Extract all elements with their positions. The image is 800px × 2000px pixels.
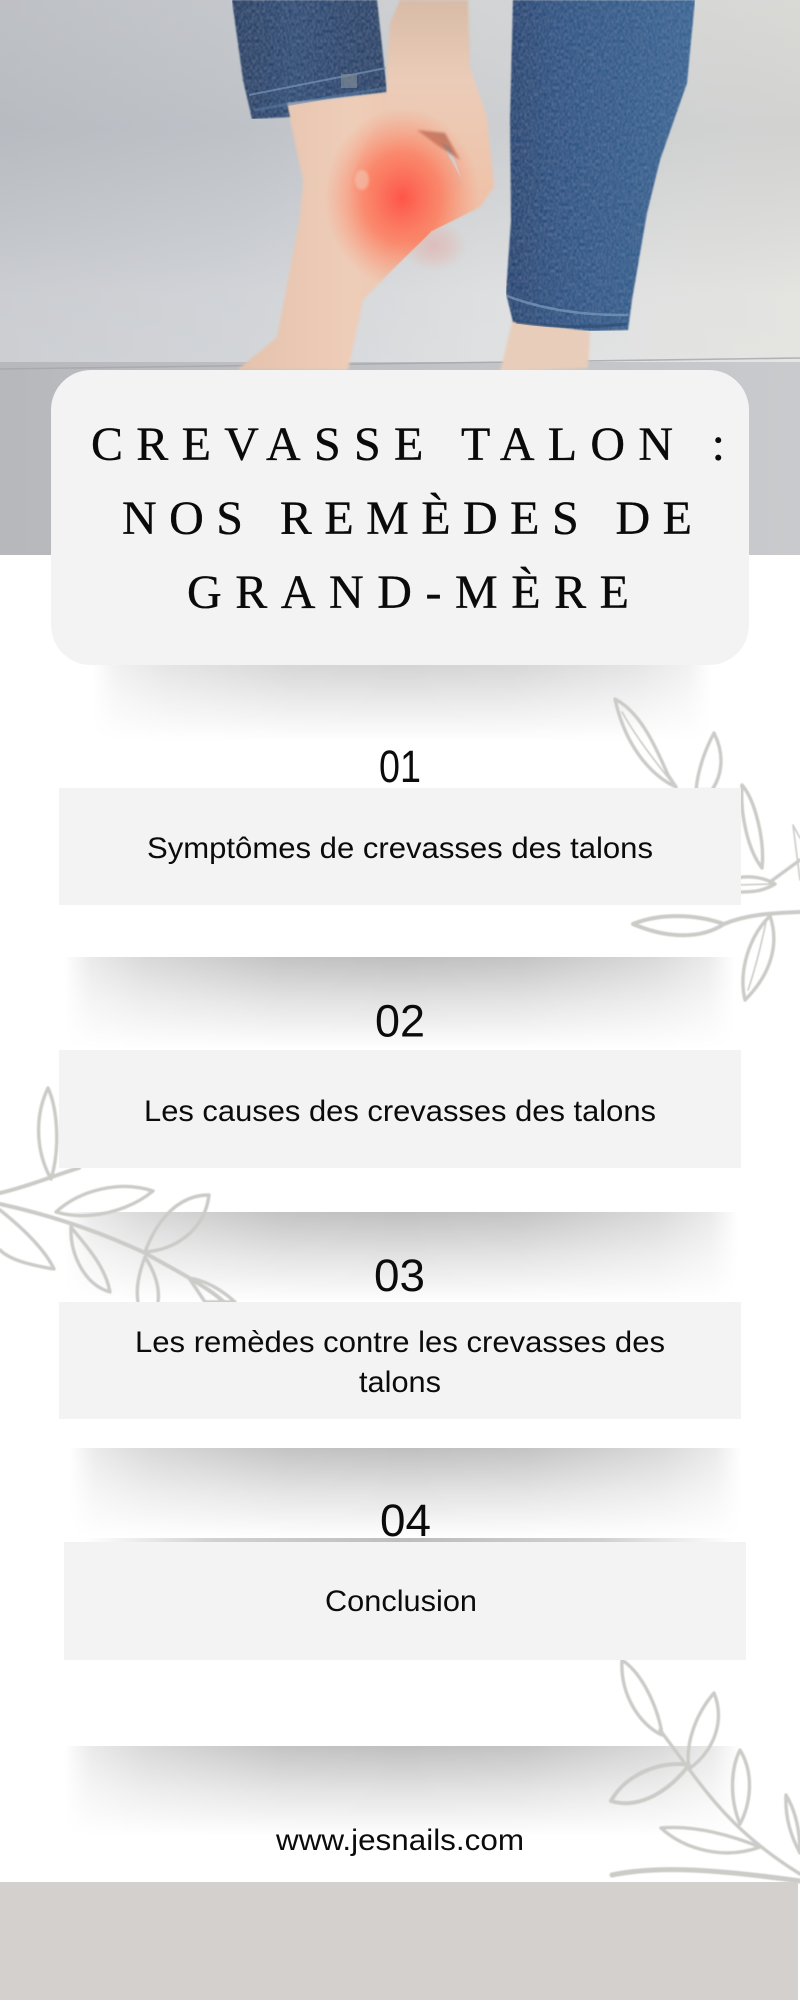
header photo: hand holding a painful heel — [0, 0, 800, 555]
heel foot — [237, 92, 465, 370]
shadow above item 03 — [74, 1212, 727, 1288]
label 03: talons — [359, 1366, 441, 1399]
box 04 — [64, 1542, 746, 1660]
shadow under title card — [106, 665, 698, 725]
divider strip above box 04 — [84, 1538, 734, 1542]
item 04 — [64, 1495, 746, 1660]
wall background — [0, 0, 800, 368]
label 02: Les causes des crevasses des talons — [144, 1095, 656, 1128]
leaves: top right branch — [615, 699, 800, 1000]
item 01 — [59, 741, 741, 905]
footer band — [0, 1882, 798, 2000]
number 01: 01 — [379, 741, 421, 792]
title card — [51, 370, 749, 665]
number 02: 02 — [375, 996, 425, 1046]
label 03 — [135, 1326, 665, 1399]
box 03 — [59, 1302, 741, 1419]
label 03: Les remèdes contre les crevasses des — [135, 1326, 665, 1359]
hand — [385, 0, 495, 232]
title text: GRAND-MÈRE — [187, 566, 629, 619]
left jean leg — [232, 0, 387, 119]
floor — [0, 358, 800, 555]
leaves: bottom right branch — [611, 1660, 800, 1881]
title text — [91, 418, 725, 619]
thumb nail — [355, 170, 369, 190]
red pain glow — [330, 114, 474, 280]
number 04: 04 — [380, 1495, 431, 1546]
item 02 — [59, 996, 741, 1168]
box 02 — [59, 1050, 741, 1168]
right jean leg — [506, 0, 695, 331]
item 03 — [59, 1250, 741, 1419]
label 04: Conclusion — [325, 1585, 477, 1618]
standing leg — [500, 318, 590, 372]
dark gap between the fingers and the heel — [417, 130, 460, 160]
shadow above item 02 — [74, 957, 724, 1035]
number 03: 03 — [374, 1250, 425, 1301]
title text: CREVASSE TALON : — [91, 418, 725, 471]
label 01: Symptômes de crevasses des talons — [147, 832, 653, 865]
leaves: left branch — [0, 1088, 235, 1302]
website: www.jesnails.com — [275, 1824, 524, 1857]
title text: NOS REMÈDES DE — [122, 492, 692, 545]
box 01 — [59, 788, 741, 905]
shadow above item 04 — [80, 1448, 731, 1524]
shadow above website — [74, 1746, 729, 1822]
